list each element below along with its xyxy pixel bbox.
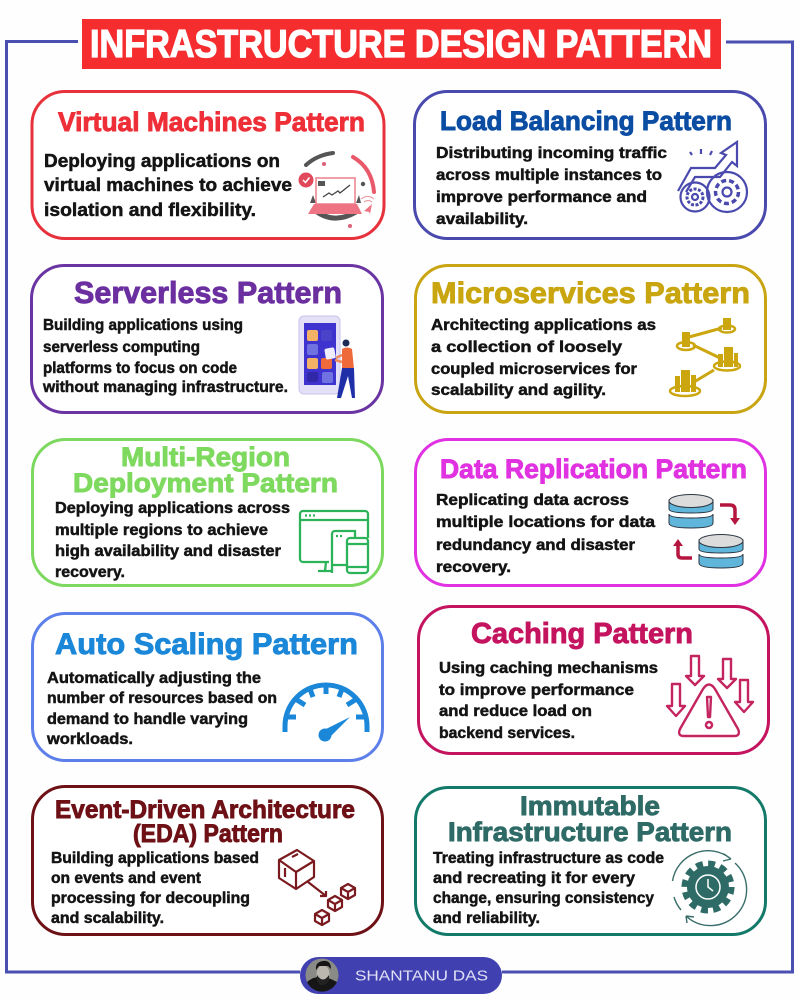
heading: auto scaling: Auto Scaling Pattern bbox=[55, 628, 358, 661]
text: caching description bbox=[439, 660, 658, 742]
panel: immutable infrastructure bbox=[416, 788, 766, 934]
text: virtual machines description: isolation and flexibility. bbox=[44, 200, 256, 220]
text: immutable description: change, ensuring consistency bbox=[433, 890, 654, 907]
heading: load balancing: Load Balancing Pattern bbox=[440, 106, 732, 136]
text: load balancing description: improve performance and bbox=[436, 189, 647, 206]
heading: immutable infrastructure: Immutable bbox=[520, 791, 660, 821]
text: data replication description: multiple locations for data bbox=[436, 514, 655, 531]
text: load balancing description bbox=[436, 145, 667, 228]
text: event-driven description: processing for decoupling bbox=[51, 890, 250, 907]
text: immutable description: and reliability. bbox=[433, 910, 540, 927]
text: multi-region description bbox=[55, 500, 290, 581]
heading: serverless: Serverless Pattern bbox=[74, 275, 342, 310]
text: virtual machines description: virtual machines to achieve bbox=[44, 175, 292, 195]
text: microservices description bbox=[431, 317, 656, 399]
heading: immutable infrastructure bbox=[448, 791, 732, 847]
text: virtual machines description bbox=[44, 151, 292, 220]
text: auto scaling description: number of resources based on bbox=[47, 690, 277, 707]
icon: cube and small cubes bbox=[279, 850, 355, 925]
text: immutable description: and recreating it for every bbox=[433, 870, 635, 887]
text: load balancing description: Distributing incoming traffic bbox=[436, 145, 667, 162]
icon: connected bar nodes bbox=[670, 318, 740, 396]
text: microservices description: Architecting applications as bbox=[431, 317, 656, 334]
text: auto scaling description: workloads. bbox=[46, 731, 133, 748]
heading: microservices: Microservices Pattern bbox=[431, 277, 750, 310]
heading: multi-region deployment bbox=[73, 442, 338, 498]
icon: gear with clock bbox=[672, 851, 747, 926]
heading: caching: Caching Pattern bbox=[471, 618, 693, 650]
heading: virtual machines: Virtual Machines Pattern bbox=[58, 107, 365, 137]
panel: multi-region deployment bbox=[32, 440, 382, 586]
text: microservices description: a collection of loosely bbox=[431, 339, 622, 356]
text: multi-region description: high availability and disaster bbox=[55, 543, 281, 560]
panel: auto scaling bbox=[32, 614, 382, 760]
author name: SHANTANU DAS bbox=[355, 968, 488, 984]
heading: event-driven architecture bbox=[55, 796, 355, 848]
heading: multi-region deployment: Multi-Region bbox=[121, 442, 290, 472]
title banner: INFRASTRUCTURE DESIGN PATTERN bbox=[90, 23, 712, 66]
heading: multi-region deployment: Deployment Pattern bbox=[73, 468, 338, 498]
icon: monitor and devices bbox=[300, 511, 368, 573]
text: caching description: Using caching mechanisms bbox=[439, 660, 658, 677]
text: immutable description bbox=[433, 850, 664, 927]
text: event-driven description bbox=[51, 850, 259, 927]
text: microservices description: scalability and agility. bbox=[431, 382, 606, 399]
panel: data replication bbox=[416, 440, 766, 586]
icon: person with phone bbox=[299, 316, 355, 398]
text: load balancing description: availability. bbox=[436, 211, 528, 228]
text: serverless description: serverless computing bbox=[43, 339, 200, 356]
text: event-driven description: Building applications based bbox=[51, 850, 259, 867]
heading: event-driven architecture: Event-Driven Architecture bbox=[55, 796, 355, 824]
text: caching description: and reduce load on bbox=[439, 703, 592, 720]
text: auto scaling description: demand to handle varying bbox=[47, 711, 248, 728]
text: virtual machines description: Deploying applications on bbox=[44, 151, 280, 171]
text: data replication description: recovery. bbox=[436, 559, 511, 576]
text: caching description: to improve performance bbox=[439, 682, 634, 699]
text: event-driven description: on events and event bbox=[51, 870, 201, 887]
text: data replication description: redundancy and disaster bbox=[436, 537, 635, 554]
text: multi-region description: recovery. bbox=[55, 564, 125, 581]
text: multi-region description: Deploying applications across bbox=[55, 500, 290, 517]
text: serverless description: platforms to focus on code bbox=[43, 360, 237, 377]
text: data replication description: Replicating data across bbox=[436, 492, 629, 509]
icon: laptop with chart bbox=[298, 153, 374, 228]
text: serverless description: without managing infrastructure. bbox=[42, 379, 288, 396]
text: caching description: backend services. bbox=[439, 725, 575, 742]
text: auto scaling description: Automatically adjusting the bbox=[47, 670, 261, 687]
icon: speed gauge bbox=[285, 685, 367, 742]
text: data replication description bbox=[436, 492, 655, 576]
icon: databases with arrows bbox=[669, 494, 743, 568]
panel: event-driven architecture bbox=[32, 786, 382, 934]
icon: warning with arrows bbox=[667, 656, 753, 736]
panel: caching bbox=[418, 606, 768, 754]
text: serverless description bbox=[42, 317, 288, 396]
panel: microservices bbox=[416, 266, 766, 412]
footer author badge bbox=[300, 957, 502, 994]
text: event-driven description: and scalability. bbox=[51, 910, 164, 927]
icon: gears with rising arrow bbox=[678, 142, 747, 212]
heading: immutable infrastructure: Infrastructure Pattern bbox=[448, 817, 732, 847]
text: load balancing description: across multiple instances to bbox=[436, 167, 662, 184]
panel: load balancing bbox=[414, 92, 766, 238]
heading: event-driven architecture: (EDA) Pattern bbox=[133, 820, 283, 848]
panel: virtual machines bbox=[32, 92, 384, 238]
text: multi-region description: multiple regions to achieve bbox=[55, 522, 268, 539]
text: microservices description: coupled microservices for bbox=[431, 361, 637, 378]
heading: data replication: Data Replication Pattern bbox=[440, 454, 747, 484]
text: immutable description: Treating infrastructure as code bbox=[433, 850, 664, 867]
avatar photo bbox=[306, 958, 338, 992]
text: auto scaling description bbox=[46, 670, 277, 748]
text: serverless description: Building applications using bbox=[43, 317, 243, 334]
panel: serverless bbox=[32, 266, 382, 412]
